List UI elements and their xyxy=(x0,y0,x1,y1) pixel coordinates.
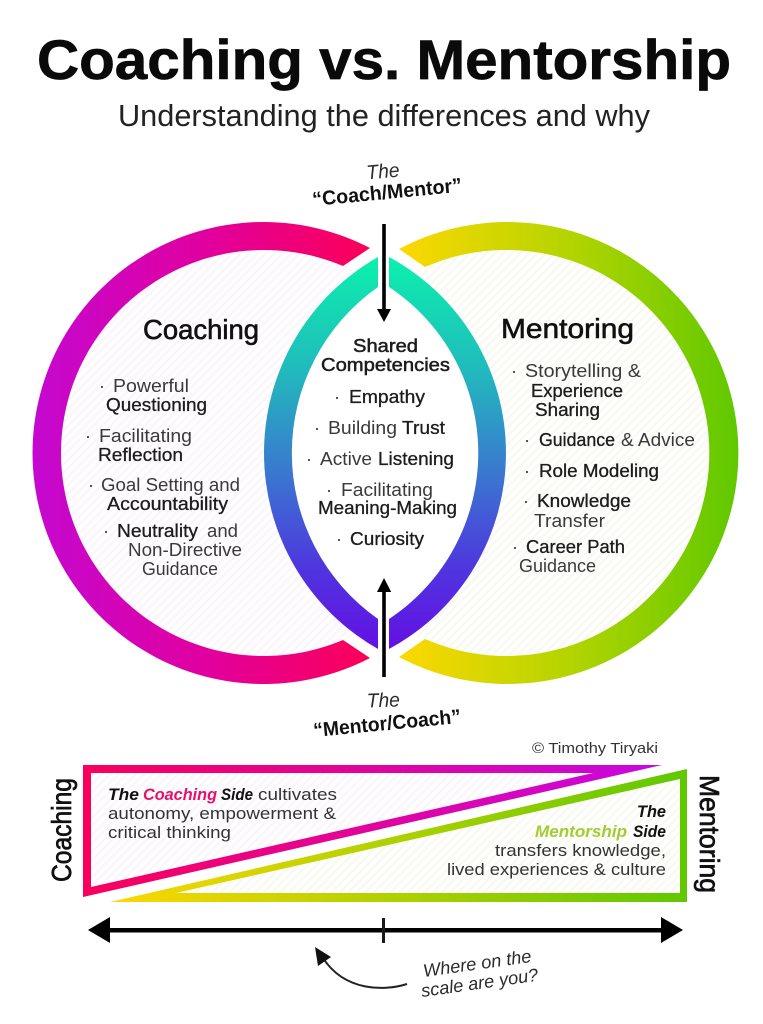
item: Facilitating Reflection: Facilitating xyxy=(99,426,192,446)
item: Neutrality and Non-Directive Guidance: Guidance xyxy=(142,559,218,579)
item: Career Path Guidance xyxy=(512,537,625,576)
item: Neutrality and Non-Directive Guidance: Neutrality xyxy=(117,521,198,541)
item: Guidance & Advice xyxy=(524,430,695,450)
heading: Shared Competencies: Competencies xyxy=(321,355,450,375)
panel: mentoring circle background xyxy=(304,249,712,657)
item: Guidance & Advice: · xyxy=(524,430,530,450)
item: Role Modeling: · xyxy=(524,461,530,481)
item: Storytelling & Experience Sharing: Storytelling & xyxy=(525,361,641,381)
item: Career Path Guidance: Guidance xyxy=(519,556,596,576)
shared lens left arc xyxy=(264,257,378,649)
label: Mentoring vertical: Mentoring xyxy=(694,775,725,893)
item: Active Listening xyxy=(306,449,454,469)
item: Facilitating Meaning-Making: Meaning-Making xyxy=(318,498,457,518)
item: Guidance & Advice: Guidance xyxy=(539,430,615,450)
scale: coaching triangle xyxy=(83,765,662,897)
coaching side text: autonomy, empowerment & xyxy=(108,804,337,823)
mentorship side text: The xyxy=(637,802,666,821)
item: Facilitating Meaning-Making: Facilitating xyxy=(341,480,433,500)
panel: shared competencies text xyxy=(306,336,457,549)
item: Powerful Questioning: Powerful xyxy=(113,376,189,396)
mentoring ring xyxy=(399,222,738,684)
bottom label: The Mentor/Coach: The xyxy=(366,689,400,713)
top label: The Coach/Mentor: “Coach/Mentor” xyxy=(311,175,463,211)
panel: mentoring text xyxy=(501,313,695,576)
scale: mentoring triangle xyxy=(110,769,687,902)
item: Active Listening: · xyxy=(306,449,312,469)
title: Coaching vs. Mentorship xyxy=(37,28,731,91)
mentorship side text: lived experiences & culture xyxy=(447,860,666,879)
item: Storytelling & Experience Sharing: · xyxy=(511,361,517,381)
item: Building Trust: · xyxy=(314,418,320,438)
label: Coaching vertical: Coaching xyxy=(46,778,77,882)
item: Storytelling & Experience Sharing: Sharing xyxy=(535,400,600,420)
item: Role Modeling: Role Modeling xyxy=(539,461,659,481)
item: Goal Setting and Accountability xyxy=(88,475,240,514)
coaching side text: cultivates xyxy=(258,785,337,804)
item: Goal Setting and Accountability: · xyxy=(88,475,94,495)
item: Building Trust: Building xyxy=(328,418,397,438)
item: Knowledge Transfer xyxy=(523,491,631,531)
coaching side text: Coaching xyxy=(143,785,218,804)
item: Empathy: Empathy xyxy=(349,387,425,407)
panel: coaching circle background xyxy=(59,249,467,657)
item: Career Path Guidance: Career Path xyxy=(526,537,625,557)
item: Active Listening: Active xyxy=(320,449,372,469)
item: Neutrality and Non-Directive Guidance xyxy=(103,521,242,579)
item: Powerful Questioning: · xyxy=(99,376,105,396)
item: Career Path Guidance: · xyxy=(512,537,518,557)
subtitle: Understanding the differences and why xyxy=(118,98,650,133)
coaching side text xyxy=(108,785,337,842)
item: Storytelling & Experience Sharing: Experience xyxy=(531,381,623,401)
coaching side text: critical thinking xyxy=(108,823,231,842)
mentorship side text xyxy=(447,802,666,879)
item: Powerful Questioning: Questioning xyxy=(106,395,207,415)
item: Knowledge Transfer: Transfer xyxy=(534,511,605,531)
item: Knowledge Transfer: · xyxy=(523,491,529,511)
item: Guidance & Advice: & Advice xyxy=(621,430,695,450)
item: Goal Setting and Accountability: Goal Setting and xyxy=(101,475,240,495)
coaching ring xyxy=(33,222,370,684)
item: Neutrality and Non-Directive Guidance: Non-Directive xyxy=(128,540,242,560)
item: Storytelling & Experience Sharing xyxy=(511,361,641,420)
arrow: top pointing down xyxy=(377,224,391,322)
item: Powerful Questioning xyxy=(99,376,207,415)
item: Goal Setting and Accountability: Accountability xyxy=(107,494,228,514)
shared lens right arc xyxy=(389,257,506,649)
arrow: bottom pointing up xyxy=(377,578,391,677)
item: Facilitating Reflection xyxy=(85,426,192,465)
coaching side text: The xyxy=(108,785,139,804)
heading: Mentoring: Mentoring xyxy=(501,313,634,344)
top label: The Coach/Mentor: The xyxy=(366,160,400,184)
copyright: © Timothy Tiryaki xyxy=(532,740,658,757)
scale arrow xyxy=(88,917,683,943)
item: Neutrality and Non-Directive Guidance: and xyxy=(207,521,238,541)
heading: Coaching: Coaching xyxy=(143,314,259,345)
panel: coaching text xyxy=(85,314,259,579)
item: Curiosity: · xyxy=(336,529,342,549)
item: Building Trust xyxy=(314,418,445,438)
item: Active Listening: Listening xyxy=(378,449,454,469)
item: Neutrality and Non-Directive Guidance: · xyxy=(103,521,109,541)
shared competencies lens background xyxy=(273,262,495,644)
item: Facilitating Reflection: · xyxy=(85,426,91,446)
mentorship side text: transfers knowledge, xyxy=(495,841,666,860)
coaching side text: Side xyxy=(221,785,253,804)
callout: where on the scale are you: scale are you? xyxy=(420,965,539,1001)
heading: Shared Competencies: Shared xyxy=(353,336,418,356)
item: Curiosity: Curiosity xyxy=(350,529,424,549)
item: Facilitating Reflection: Reflection xyxy=(98,445,183,465)
item: Facilitating Meaning-Making xyxy=(318,480,457,518)
item: Knowledge Transfer: Knowledge xyxy=(537,491,631,511)
callout: where on the scale are you xyxy=(420,946,539,1001)
bottom label: The Mentor/Coach: “Mentor/Coach” xyxy=(312,706,462,742)
item: Building Trust: Trust xyxy=(402,418,445,438)
bottom label: The Mentor/Coach xyxy=(312,689,462,742)
mentorship side text: Side xyxy=(633,822,666,841)
heading: Shared Competencies xyxy=(321,336,450,375)
item: Empathy: · xyxy=(334,387,340,407)
curved arrow xyxy=(315,947,407,988)
callout: where on the scale are you: Where on the xyxy=(422,946,532,981)
mentorship side text: Mentorship xyxy=(535,822,627,841)
item: Facilitating Meaning-Making: · xyxy=(326,480,332,500)
